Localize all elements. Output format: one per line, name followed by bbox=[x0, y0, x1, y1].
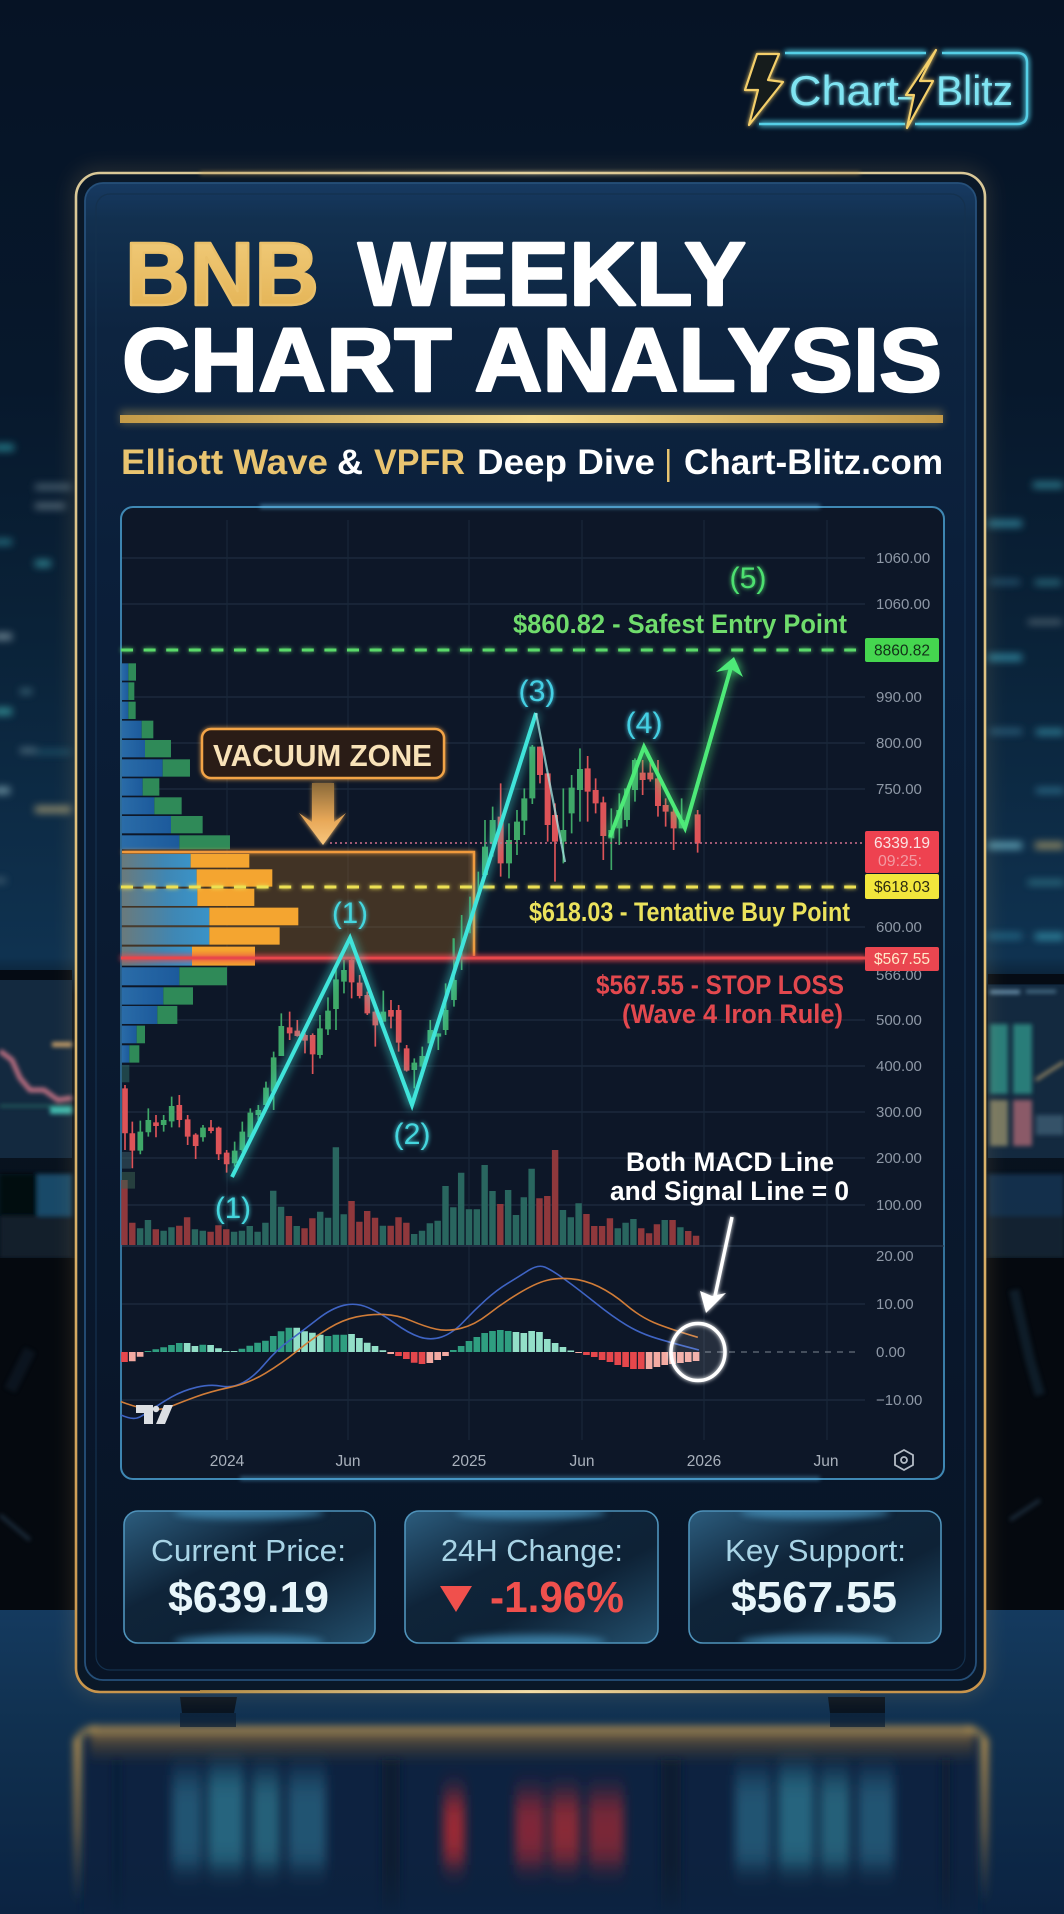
logo wordmark: Blitz bbox=[936, 67, 1013, 114]
volume bars bbox=[124, 1147, 696, 1245]
icon: settings hexagon bbox=[895, 1450, 913, 1470]
y axis labels: −10.00 bbox=[876, 1392, 922, 1409]
card: 24h change: 24H Change: bbox=[441, 1533, 623, 1568]
x axis labels: Jun bbox=[814, 1453, 838, 1470]
candlesticks: second half bbox=[453, 745, 698, 958]
y axis labels: 20.00 bbox=[876, 1248, 914, 1265]
x axis labels: 2025 bbox=[452, 1453, 486, 1470]
stand legs bbox=[180, 1697, 885, 1727]
y axis labels: 300.00 bbox=[876, 1104, 922, 1121]
logo wordmark: Chart bbox=[789, 67, 899, 114]
icon: left lightning bolt bbox=[745, 54, 783, 125]
wave labels: (2) bbox=[394, 1118, 430, 1151]
label: stop loss: $567.55 - STOP LOSS bbox=[596, 970, 844, 1000]
wave labels: (5) bbox=[730, 562, 766, 595]
wave line 3 to 4 start bbox=[536, 713, 565, 862]
price tags: $567.55 bbox=[874, 951, 930, 968]
macd callout text bbox=[610, 1147, 849, 1206]
wave labels: (3) bbox=[518, 675, 556, 708]
card: current price: Current Price: bbox=[151, 1533, 346, 1568]
y axis labels: 1060.00 bbox=[876, 596, 930, 613]
wave labels: (1) bbox=[215, 1192, 251, 1225]
subtitle: Chart-Blitz.com bbox=[684, 443, 943, 482]
wave labels: (4) bbox=[626, 707, 662, 740]
gold divider bbox=[120, 410, 943, 424]
volume profile: vacuum zone rows bbox=[122, 854, 298, 966]
wave labels: (1) bbox=[332, 897, 368, 930]
wave labels bbox=[215, 562, 766, 1225]
logo: Chart-Blitz bbox=[745, 50, 1027, 128]
y axis labels: 600.00 bbox=[876, 919, 922, 936]
icon: tradingview logo bbox=[136, 1405, 173, 1424]
line: tentative buy bbox=[121, 886, 856, 888]
macd zero line bbox=[705, 1351, 860, 1353]
subtitle: VPFR bbox=[374, 443, 465, 482]
logo wordmark bbox=[789, 67, 1013, 114]
y axis labels: 100.00 bbox=[876, 1197, 922, 1214]
subtitle: Elliott Wave bbox=[121, 443, 328, 482]
label: safest entry: $860.82 - Safest Entry Point bbox=[513, 609, 847, 639]
y axis labels: 200.00 bbox=[876, 1150, 922, 1167]
card: 24h change bbox=[405, 1505, 658, 1649]
y axis labels: 990.00 bbox=[876, 689, 922, 706]
y axis labels: 400.00 bbox=[876, 1058, 922, 1075]
title bbox=[122, 225, 942, 411]
card: current price: $639.19 bbox=[168, 1573, 329, 1622]
wave lines 1 to 3 bbox=[232, 713, 536, 1177]
line: safest entry bbox=[121, 648, 856, 652]
card: key support: $567.55 bbox=[731, 1573, 897, 1622]
panel reflection on floor bbox=[74, 1726, 988, 1914]
macd histogram bbox=[124, 1328, 696, 1369]
arrow: vacuum zone bbox=[299, 783, 346, 845]
price tags: 6339.19 bbox=[874, 835, 930, 852]
x axis labels: 2024 bbox=[210, 1453, 245, 1470]
card: key support: Key Support: bbox=[725, 1533, 906, 1568]
vacuum zone box bbox=[122, 852, 474, 956]
price tags bbox=[865, 638, 939, 971]
card: 24h change: -1.96% bbox=[490, 1573, 624, 1622]
arrow: macd callout bbox=[700, 1217, 732, 1313]
logo frame bbox=[759, 53, 1027, 124]
vacuum zone label: VACUUM ZONE bbox=[213, 738, 432, 773]
wave line 4 and 5 arrow bbox=[610, 657, 743, 837]
x axis labels bbox=[210, 1453, 838, 1470]
current price dotted line bbox=[330, 842, 865, 844]
macd lines bbox=[121, 1266, 699, 1418]
subtitle: Deep Dive bbox=[477, 443, 655, 482]
main panel bbox=[70, 166, 991, 1698]
y axis labels: 750.00 bbox=[876, 781, 922, 798]
price tags: $618.03 bbox=[874, 879, 930, 896]
y axis labels: 566.00 bbox=[876, 967, 922, 984]
label: tentative buy: $618.03 - Tentative Buy Point bbox=[529, 897, 850, 927]
macd highlight circle bbox=[671, 1324, 725, 1380]
title: CHART ANALYSIS bbox=[122, 311, 942, 411]
line: stop loss bbox=[121, 956, 866, 960]
vacuum zone label bbox=[202, 729, 444, 778]
y axis labels: 10.00 bbox=[876, 1296, 914, 1313]
volume profile bbox=[122, 663, 230, 1189]
y axis labels: 800.00 bbox=[876, 735, 922, 752]
macd callout text: Both MACD Line bbox=[626, 1147, 834, 1177]
label: stop loss bbox=[596, 970, 844, 1029]
price tags: 8860.82 bbox=[874, 642, 930, 660]
x axis labels: 2026 bbox=[687, 1453, 721, 1470]
subtitle bbox=[121, 443, 943, 482]
icon: middle lightning bolt bbox=[906, 50, 936, 128]
y axis labels: 1060.00 bbox=[876, 550, 930, 567]
card: key support bbox=[689, 1505, 941, 1649]
macd callout text: and Signal Line = 0 bbox=[610, 1176, 849, 1206]
x axis labels: Jun bbox=[570, 1453, 594, 1470]
y axis labels bbox=[876, 550, 930, 1409]
panel: price chart bbox=[121, 505, 944, 1649]
y axis labels: 0.00 bbox=[876, 1344, 905, 1361]
price tags: 09:25: bbox=[878, 853, 922, 870]
candlesticks: first half bbox=[125, 920, 462, 1173]
title: WEEKLY bbox=[358, 225, 746, 325]
x axis labels: Jun bbox=[336, 1453, 360, 1470]
subtitle: & bbox=[337, 443, 363, 482]
y axis labels: 500.00 bbox=[876, 1012, 922, 1029]
label: stop loss: (Wave 4 Iron Rule) bbox=[622, 999, 843, 1029]
title: BNB bbox=[125, 225, 319, 325]
card: current price bbox=[124, 1505, 375, 1649]
